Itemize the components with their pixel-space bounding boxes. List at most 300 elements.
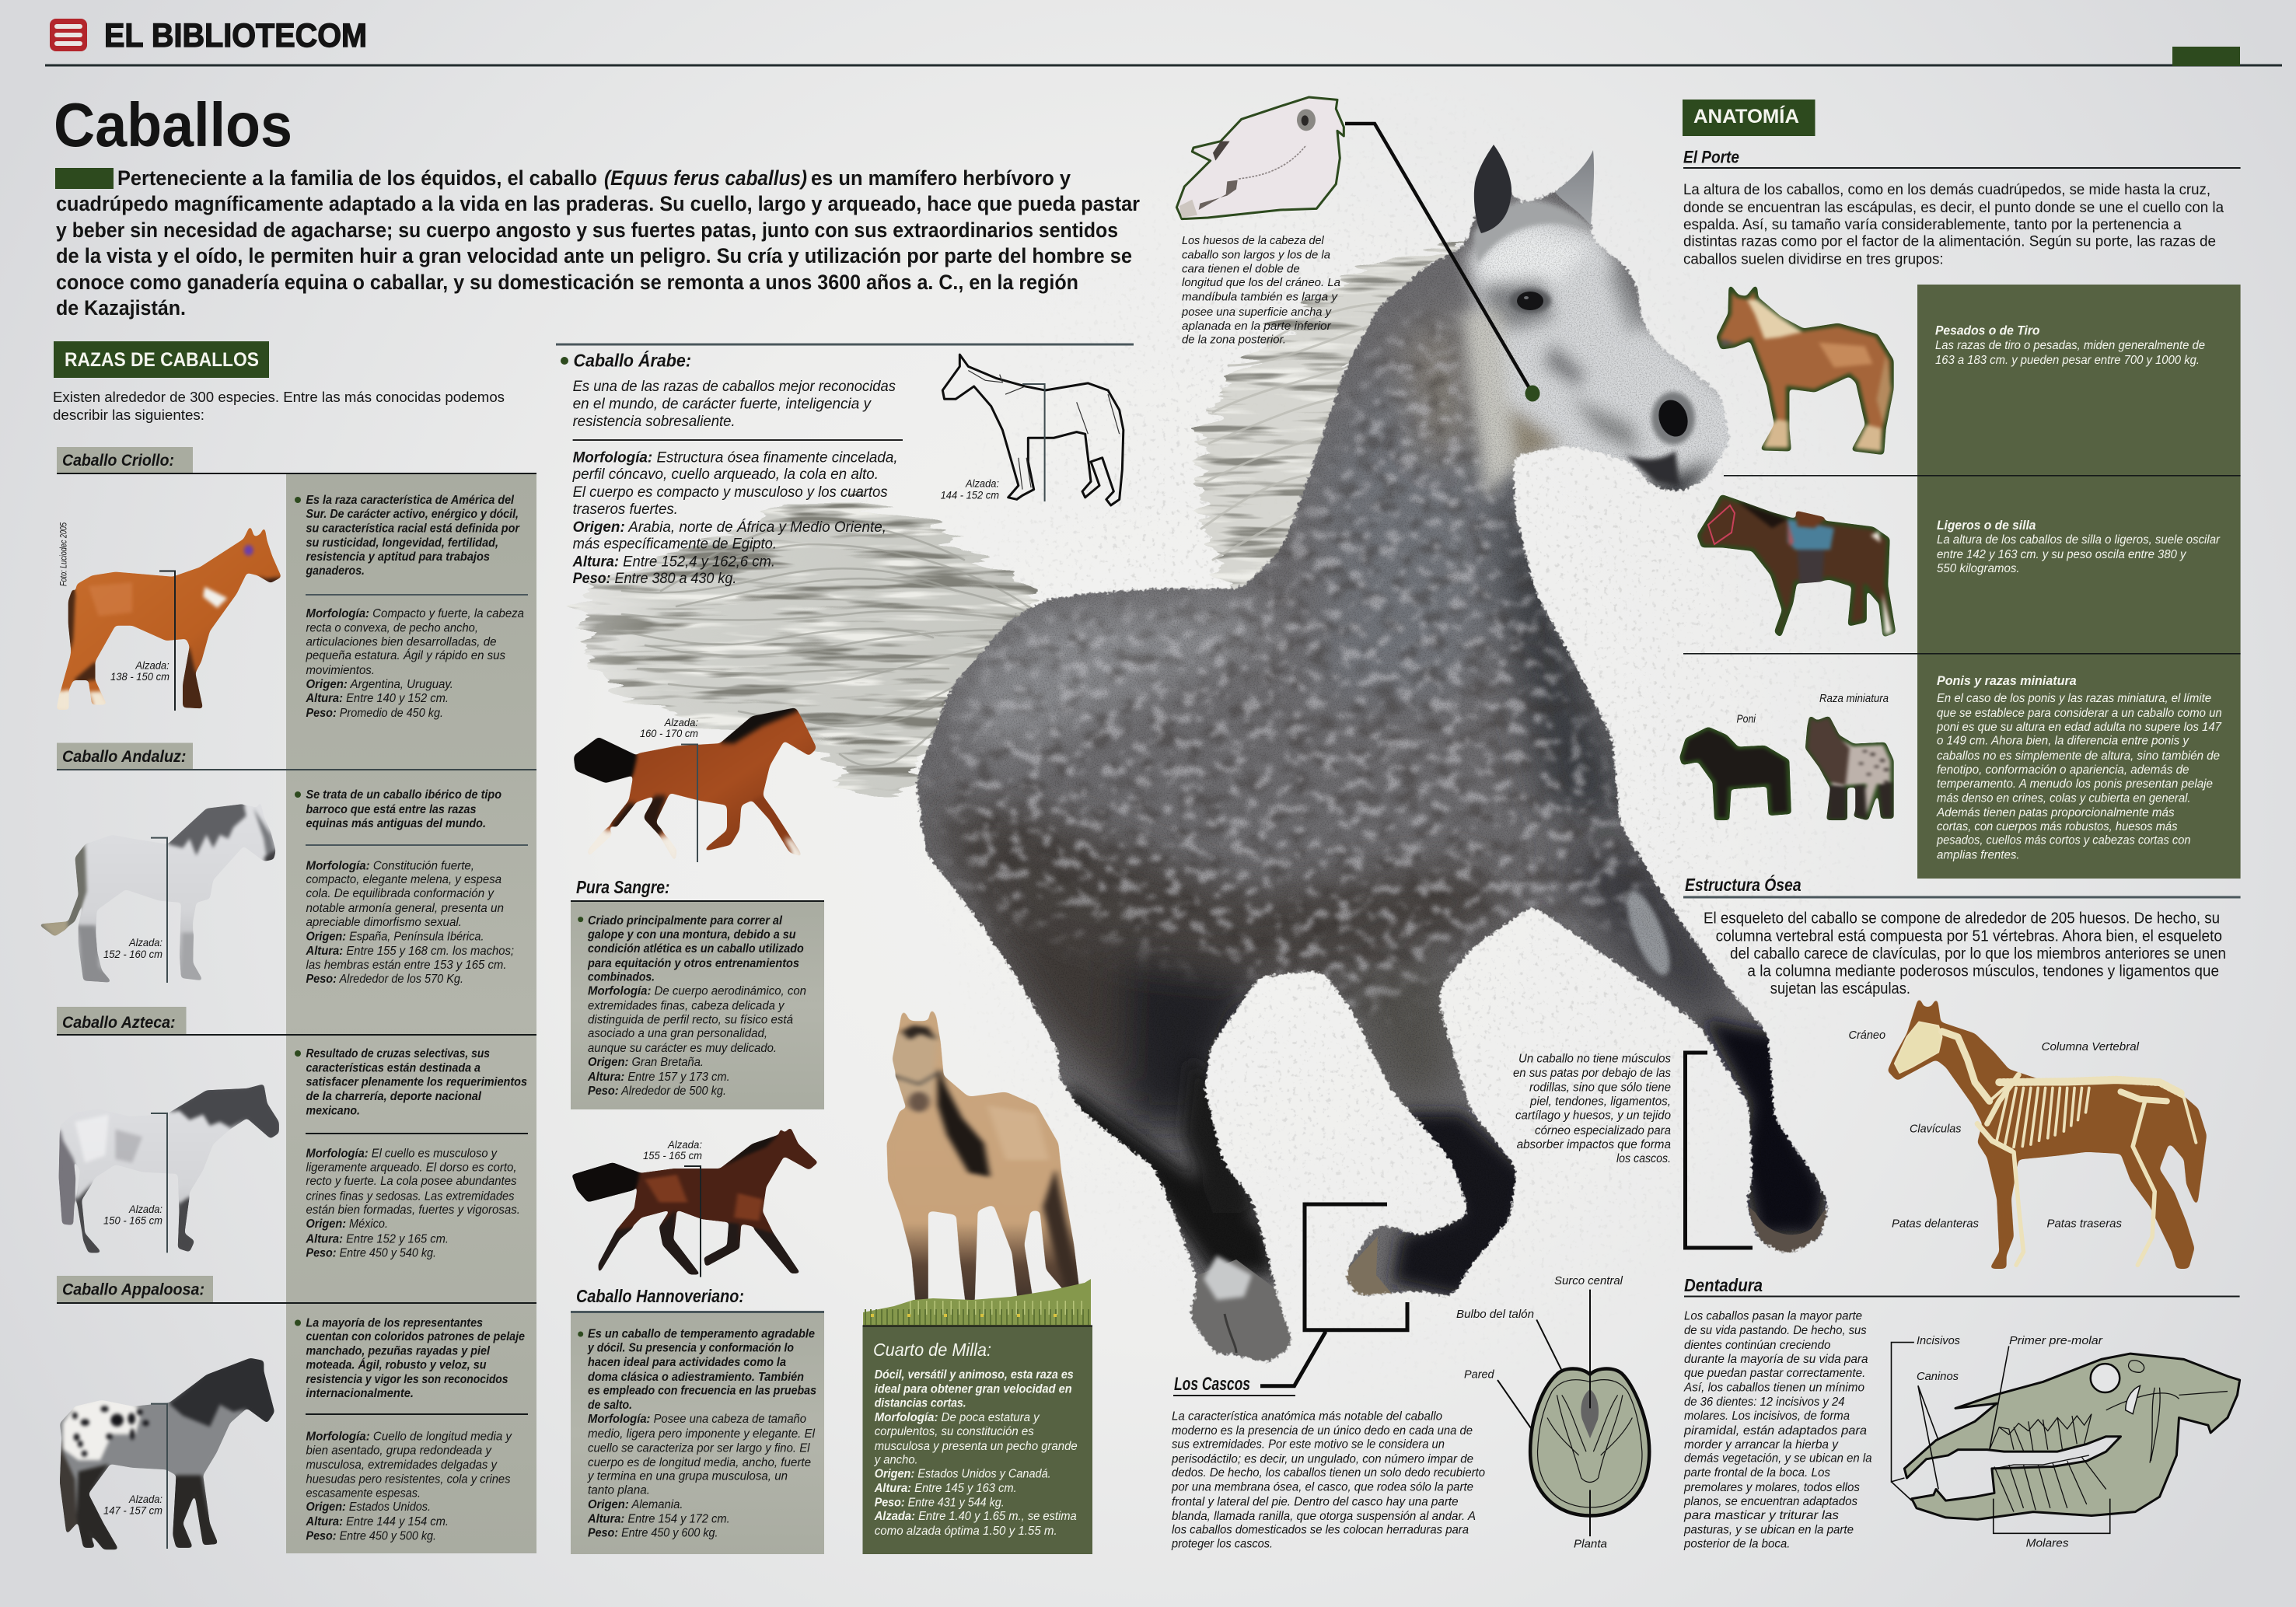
- skull labels: Caninos: [1917, 1370, 1959, 1383]
- eye socket: [2091, 1364, 2120, 1392]
- intro paragraph: (Equus ferus caballus): [604, 166, 807, 190]
- horse: Cuarto de Milla: [886, 1004, 1080, 1308]
- details: Morfología: El cuello es musculoso y: [306, 1148, 498, 1160]
- header green tab: [2172, 47, 2240, 66]
- description: Es una de las razas de caballos mejor reconocidas: [573, 379, 896, 395]
- main horse mane: [1200, 247, 1464, 614]
- text: piramidal, están adaptados para: [1683, 1424, 1867, 1438]
- description: [587, 1328, 816, 1540]
- height label: [110, 659, 169, 683]
- height label: Alzada:: [664, 717, 698, 728]
- text: [1683, 1309, 1872, 1551]
- text: para masticar y triturar las: [1683, 1509, 1839, 1522]
- description: Es un caballo de temperamento agradable: [588, 1328, 815, 1340]
- description: Peso: Entre 450 y 600 kg.: [588, 1527, 718, 1540]
- skull caption: aplanada en la parte inferior: [1182, 320, 1332, 333]
- height label: [103, 1493, 163, 1517]
- text: La altura de los caballos, como en los demás cuadrúpedos, se mide hasta la cruz,: [1683, 182, 2210, 198]
- description: Dócil, versátil y animoso, esta raza es: [875, 1368, 1074, 1382]
- height label: 150 - 165 cm: [103, 1214, 163, 1227]
- text: ponis: cortas, con cuerpos más robustos, huesos más: [1937, 820, 2178, 833]
- breed: Caballo Appaloosa: [57, 1276, 536, 1549]
- description: [874, 1368, 1078, 1538]
- icon: logo stack: [50, 19, 87, 51]
- height label: Alzada:: [135, 659, 169, 672]
- horse: saddle horse: [1699, 496, 1894, 635]
- details: Morfología: Estructura ósea finamente cincelada,: [573, 449, 898, 466]
- height label: Alzada:: [128, 936, 163, 948]
- bullet: [295, 497, 301, 503]
- horse: Criollo: [57, 525, 282, 710]
- skeleton labels: Patas traseras: [2046, 1217, 2122, 1231]
- height marker: [159, 571, 175, 711]
- description: combinados.: [588, 971, 655, 984]
- description: ideal para obtener gran velocidad en: [875, 1383, 1072, 1396]
- text: de su vida pastando. De hecho, sus: [1684, 1324, 1867, 1337]
- summary: [306, 788, 501, 830]
- summary: ganaderos.: [306, 564, 365, 578]
- summary: de la charrería, deporte nacional: [306, 1090, 482, 1103]
- text: del caballo carece de clavículas, por lo que los miembros anteriores se unen: [1730, 945, 2226, 962]
- text: sujetan las escápulas.: [1770, 980, 1910, 997]
- tab: Azteca: [57, 1007, 187, 1034]
- note: musculos: en sus patas por debajo de las: [1513, 1067, 1671, 1080]
- skull outline: [1904, 1354, 2240, 1519]
- description: y termina en una grupa musculosa, un: [587, 1470, 788, 1483]
- description: de salto.: [588, 1399, 632, 1412]
- logo wordmark: EL BIBLIOTECOM: [104, 17, 367, 54]
- text: proteger los cascos.: [1171, 1538, 1273, 1551]
- intro marker block: [55, 168, 114, 189]
- text: premolares y molares, todos ellos: [1683, 1481, 1860, 1494]
- grass: [863, 1279, 1091, 1326]
- tab: Appaloosa: [57, 1276, 213, 1303]
- details: articulaciones bien desarrolladas, de: [306, 636, 497, 648]
- hair grain: [894, 117, 1866, 1399]
- text: pasturas, y se ubican en la parte: [1683, 1524, 1854, 1537]
- horse: pony: [1681, 728, 1790, 819]
- skull caption: caballo son largos y los de la: [1182, 249, 1330, 262]
- text: pesados: Pesados o de Tiro: [1935, 323, 2040, 337]
- description: para equitación y otros entrenamientos: [587, 957, 799, 970]
- note: musculos: córneo especializado para: [1535, 1124, 1671, 1137]
- text: espalda. Así, su tamaño varía considerablemente, tanto por la pertenencia a: [1683, 217, 2182, 233]
- horse outline drawing: [942, 355, 1124, 505]
- summary: resistencia y vigor les son reconocidos: [306, 1373, 508, 1386]
- panel: [571, 1312, 824, 1554]
- description: aunque su carácter es muy delicado.: [588, 1042, 777, 1055]
- summary: resistencia y aptitud para trabajos: [306, 550, 490, 564]
- description: como alzada óptima 1.50 y 1.55 m.: [875, 1525, 1057, 1538]
- intro paragraph: conoce como ganadería equina o caballar, y su domesticación se remonta a unos 3600 años a. C., en la región: [56, 271, 1078, 294]
- label: planta: Planta: [1574, 1538, 1607, 1551]
- details: Peso: Entre 450 y 500 kg.: [306, 1530, 436, 1543]
- summary: La mayoría de los representantes: [306, 1317, 483, 1330]
- breed: Caballo Criollo: [57, 447, 536, 720]
- height label: [941, 477, 999, 501]
- skeleton diagram: [1888, 996, 2207, 1269]
- details: [306, 607, 524, 720]
- description: Altura: Entre 154 y 172 cm.: [587, 1513, 730, 1525]
- label: raza miniatura: Raza miniatura: [1819, 693, 1889, 705]
- description: Origen: Gran Bretaña.: [588, 1056, 704, 1069]
- text: dientes continúan creciendo: [1684, 1339, 1830, 1352]
- brown horse silhouette: [1888, 996, 2207, 1269]
- text: ligeros: 550 kilogramos.: [1937, 562, 2020, 575]
- heading: razas de caballos: [54, 341, 269, 378]
- details: musculosa, extremidades delgadas y: [306, 1459, 498, 1472]
- height label: Alzada:: [128, 1203, 163, 1215]
- heading: Dentadura: [1684, 1275, 1763, 1295]
- details: recta o convexa, de pecho ancho,: [306, 622, 478, 634]
- text: Así, los caballos tienen un mínimo: [1683, 1382, 1864, 1395]
- section: los cascos: [1171, 1374, 1485, 1551]
- heading: El Porte: [1683, 148, 1739, 167]
- text: morder y arrancar la hierba y: [1684, 1438, 1839, 1452]
- details: Altura: Entre 152 y 165 cm.: [306, 1233, 449, 1245]
- summary: cuentan con coloridos patrones de pelaje: [306, 1330, 525, 1343]
- description: corpulentos, su constitución es: [875, 1425, 1034, 1438]
- details: Altura: Entre 140 y 152 cm.: [306, 692, 449, 705]
- horse tonal shading: [933, 311, 1726, 1127]
- height label: Alzada:: [965, 477, 999, 490]
- skull pointer line: [1345, 124, 1532, 393]
- details: Origen: España, Península Ibérica.: [306, 930, 484, 944]
- details: Altura: Entre 155 y 168 cm. los machos;: [306, 945, 514, 958]
- panel: [571, 901, 824, 1109]
- skeleton labels: [1849, 1029, 2140, 1231]
- details: recto y fuerte. La cola posee abundantes: [306, 1175, 517, 1188]
- summary: su rusticidad, longevidad, fertilidad,: [306, 536, 498, 550]
- summary: Se trata de un caballo ibérico de tipo: [306, 788, 501, 802]
- details: apreciable dimorfismo sexual.: [306, 916, 462, 929]
- description: distinguida de perfil recto, su físico está: [588, 1014, 793, 1026]
- text: pesados: Las razas de tiro o pesadas, miden generalmente de: [1935, 339, 2205, 352]
- text: ligeros: [1937, 519, 2221, 575]
- intro paragraph: es un mamífero herbívoro y: [811, 166, 1071, 190]
- text: ligeros: entre 142 y 163 cm. y su peso oscila entre 380 y: [1937, 548, 2187, 561]
- heading: anatomia: ANATOMÍA: [1693, 105, 1799, 128]
- height marker: [151, 838, 167, 983]
- height marker: [151, 1404, 167, 1549]
- details: Morfología: Cuello de longitud media y: [306, 1431, 512, 1443]
- main horse tail: [579, 501, 1045, 794]
- skull caption: posee una superficie ancha y: [1181, 306, 1332, 319]
- summary: equinas más antiguas del mundo.: [306, 817, 486, 830]
- details: Peso: Alrededor de los 570 Kg.: [306, 973, 463, 986]
- height label: [103, 936, 163, 960]
- description: Altura: Entre 157 y 173 cm.: [587, 1071, 730, 1084]
- summary: Sur. De carácter activo, enérgico y dócil,: [306, 508, 519, 521]
- breed: Caballo Árabe: [561, 350, 1124, 587]
- text: que puedan pastar correctamente.: [1684, 1367, 1865, 1380]
- description: Criado principalmente para correr al: [588, 914, 783, 928]
- skull labels: [1917, 1334, 2103, 1550]
- skull photo: [1176, 97, 1344, 219]
- bullet: [561, 357, 568, 365]
- text: ponis: amplias frentes.: [1937, 849, 2020, 862]
- details: [572, 449, 898, 587]
- summary: Resultado de cruzas selectivas, sus: [306, 1047, 490, 1060]
- horse: draft horse: [1718, 287, 1892, 453]
- details: ligeramente arqueado. El dorso es corto,: [306, 1162, 516, 1175]
- hoof diagram: [1456, 1274, 1649, 1551]
- skull caption: [1181, 234, 1340, 347]
- summary: moteada. Ágil, robusto y veloz, su: [306, 1359, 487, 1372]
- photo credit: Foto: Luciodec 2005: [58, 522, 68, 586]
- text: ponis: [1936, 674, 2222, 862]
- heading: Caballo Árabe:: [574, 350, 691, 370]
- text: caballos suelen dividirse en tres grupos:: [1683, 252, 1944, 268]
- details: Altura: Entre 152,4 y 162,6 cm.: [572, 554, 775, 571]
- center column rule: [556, 344, 1134, 345]
- details: Peso: Promedio de 450 kg.: [306, 707, 443, 720]
- text: ponis: En el caso de los ponis y las razas miniatura, el límite: [1937, 692, 2211, 705]
- details: Origen: México.: [306, 1217, 388, 1231]
- text: parte frontal de la boca. Los: [1683, 1466, 1830, 1479]
- hoof sole: [1530, 1290, 1649, 1536]
- height marker: [681, 745, 697, 862]
- lower legs dark: [1057, 1018, 1827, 1298]
- details: El cuerpo es compacto y musculoso y los cuartos: [573, 484, 888, 501]
- text: distintas razas como por el factor de la alimentación. Según su porte, las razas de: [1683, 234, 2216, 250]
- details: [306, 859, 514, 986]
- description: Morfología: De cuerpo aerodinámico, con: [588, 984, 806, 998]
- height label: 155 - 165 cm: [643, 1150, 702, 1162]
- horse: Andaluz: [38, 801, 275, 983]
- pointer dot: [1525, 386, 1539, 401]
- text: ponis: pesados, cuellos más cortos y cabezas cortas con: [1936, 834, 2191, 847]
- text: pesados: [1935, 323, 2205, 367]
- header rule: [45, 64, 2282, 67]
- text: pesados: 163 a 183 cm. y pueden pesar entre 700 y 1000 kg.: [1935, 354, 2200, 367]
- intro paragraph: Perteneciente a la familia de los équidos, el caballo: [117, 166, 597, 190]
- text: ligeros: Ligeros o de silla: [1937, 519, 2036, 533]
- height marker: [151, 1113, 167, 1252]
- head coat: [1462, 198, 1742, 505]
- skull caption: de la zona posterior.: [1182, 334, 1286, 347]
- tab: Criollo: [57, 447, 193, 473]
- skeleton labels: Clavículas: [1910, 1123, 1962, 1136]
- details: cola. De equilibrada conformación y: [306, 887, 494, 900]
- upper teeth: [1990, 1414, 2092, 1452]
- summary: satisfacer plenamente los requerimientos: [306, 1076, 527, 1089]
- description: es empleado con frecuencia en las pruebas: [588, 1385, 816, 1398]
- dapple pattern: [855, 233, 1788, 1166]
- section: el porte: [1683, 148, 2241, 268]
- saddle horse halter: [1708, 505, 1735, 544]
- heading: razas de caballos: RAZAS DE CABALLOS: [65, 349, 259, 371]
- left ear: [1474, 145, 1511, 233]
- summary: manchado, pezuñas rayadas y piel: [306, 1345, 491, 1357]
- summary: mexicano.: [306, 1104, 360, 1118]
- description: distancias cortas.: [875, 1396, 966, 1410]
- details: Peso: Entre 380 a 430 kg.: [573, 571, 736, 587]
- text: molares. Los incisivos, de forma: [1684, 1410, 1850, 1423]
- text: [1704, 910, 2226, 997]
- skull caption: cara tienen el doble de: [1182, 263, 1300, 276]
- panel: porte groups: [1917, 285, 2241, 879]
- forelock: [1473, 202, 1591, 264]
- text: El esqueleto del caballo se compone de alrededor de 205 huesos. De hecho, su: [1704, 910, 2220, 928]
- text: demás vegetación, y se ubican en la: [1684, 1452, 1872, 1466]
- panel: [863, 1326, 1092, 1554]
- description: resistencia sobresaliente.: [573, 414, 736, 430]
- details: movimientos.: [306, 664, 375, 677]
- text: sus extremidades. Por este motivo se le considera un: [1172, 1438, 1445, 1452]
- description: tanto plana.: [588, 1483, 650, 1497]
- tab: Andaluz: [57, 743, 193, 770]
- text: durante la mayoría de su vida para: [1684, 1353, 1868, 1366]
- description: hacen ideal para actividades como la: [588, 1356, 786, 1369]
- eye: [1509, 288, 1551, 313]
- bracket: pata: [1686, 1053, 1753, 1248]
- heading: Caballo Hannoveriano:: [576, 1286, 744, 1306]
- summary: Es la raza característica de América del: [306, 494, 515, 507]
- note: musculos: piel, tendones, ligamentos,: [1529, 1095, 1671, 1109]
- intro paragraph: de la vista y el oído, le permiten huir a gran velocidad ante un peligro. Su cría y utilización por parte del hombre se: [56, 244, 1132, 267]
- details: compacto, elegante melena, y espesa: [306, 873, 501, 886]
- razas intro text: [53, 389, 505, 423]
- pared leader: [1497, 1380, 1531, 1428]
- text: ponis: temperamento. A menudo los ponis presentan pelaje: [1937, 777, 2213, 791]
- skeleton bones: [1895, 1022, 2196, 1265]
- skeleton labels: Cráneo: [1849, 1029, 1885, 1042]
- summary: [306, 1317, 525, 1400]
- text: ponis: fenotipo, conformación o apariencia, además de: [1937, 763, 2189, 777]
- height marker: [684, 1166, 701, 1277]
- height label: 147 - 157 cm: [103, 1504, 163, 1517]
- details: Morfología: Compacto y fuerte, la cabeza: [306, 607, 524, 620]
- lower teeth: [1994, 1455, 2106, 1512]
- summary: [306, 1047, 527, 1118]
- text: columna vertebral está compuesta por 51 vértebras. Ahora bien, el esqueleto: [1716, 928, 2222, 945]
- description: extremidades finas, cabeza delicada y: [588, 1000, 785, 1013]
- height label: [103, 1203, 163, 1227]
- height marker: [1022, 384, 1045, 501]
- height label: 160 - 170 cm: [640, 728, 698, 739]
- description: asociado a una gran personalidad,: [588, 1027, 767, 1040]
- details: bien asentado, grupa redondeada y: [306, 1445, 492, 1458]
- razas intro text: Existen alrededor de 300 especies. Entre las más conocidas podemos: [53, 389, 505, 405]
- description: Origen: Estados Unidos y Canadá.: [875, 1467, 1051, 1480]
- details: [306, 1148, 520, 1260]
- description: en el mundo, de carácter fuerte, inteligencia y: [573, 397, 872, 413]
- height label: 138 - 150 cm: [110, 670, 169, 683]
- arrow: los cascos leader: [1260, 1332, 1326, 1386]
- text: a la columna mediante poderosos músculos, tendones y ligamentos que: [1747, 963, 2219, 980]
- horse base coat: [894, 117, 1866, 1399]
- text: ponis: Además tienen patas proporcionalmente más: [1936, 806, 2175, 819]
- nostril: [1651, 392, 1695, 445]
- text: [1683, 182, 2224, 268]
- breed: Cuarto de Milla: [863, 1004, 1092, 1554]
- skull labels: Incisivos: [1917, 1334, 1960, 1347]
- skull diagram: [1891, 1343, 2240, 1533]
- horse: miniature: [1807, 718, 1892, 819]
- details: Morfología: Constitución fuerte,: [306, 859, 474, 872]
- text: ponis: más denso en crines, colas y cubierta en general.: [1937, 791, 2191, 805]
- summary: barroco que está entre las razas: [306, 803, 477, 816]
- heading: Pura Sangre:: [576, 877, 670, 897]
- text: por una membrana ósea, el casco, que rodea sólo la parte: [1171, 1481, 1473, 1494]
- text: ligeros: La altura de los caballos de silla o ligeros, suele oscilar: [1937, 533, 2221, 547]
- details: Altura: Entre 144 y 154 cm.: [306, 1515, 449, 1528]
- details: las hembras están entre 153 y 165 cm.: [306, 959, 507, 972]
- skull caption: mandíbula también es larga y: [1182, 291, 1339, 304]
- tab: Andaluz: Caballo Andaluz:: [62, 748, 187, 766]
- summary: características están destinada a: [306, 1062, 481, 1074]
- summary: su característica racial está definida por: [306, 522, 520, 536]
- skull labels: Primer pre-molar: [2009, 1334, 2103, 1347]
- pointer lines: [1891, 1343, 2110, 1533]
- text: ponis: Ponis y razas miniatura: [1937, 674, 2077, 688]
- text: frontal y lateral del pie. Dentro del casco hay una parte: [1172, 1496, 1459, 1509]
- height label: [640, 717, 698, 739]
- intro paragraph: [55, 166, 1140, 320]
- text: ponis: que se establece para considerar a un caballo como un: [1937, 707, 2222, 720]
- group rules: [1683, 475, 2241, 655]
- skeleton labels: Columna Vertebral: [2042, 1040, 2140, 1053]
- text: de 36 dientes: 12 incisivos y 24: [1684, 1396, 1845, 1409]
- text: donde se encuentran las escápulas, es decir, el punto donde se une el cuello con la: [1683, 200, 2224, 216]
- note: musculos: absorber impactos que forma: [1517, 1138, 1671, 1151]
- text: blanda, llamada ranilla, que otorga suspensión al andar. A: [1172, 1510, 1476, 1523]
- summary: internacionalmente.: [306, 1387, 414, 1400]
- text: perisodáctilo; es decir, un ungulado, con número impar de: [1171, 1453, 1473, 1466]
- details: huesudas pero resistentes, cola y crines: [306, 1473, 511, 1486]
- tab: Criollo: Caballo Criollo:: [62, 452, 174, 470]
- hooves: [1190, 1207, 1827, 1364]
- bullet: [295, 791, 301, 798]
- main horse: grey dappled galloping horse: [914, 145, 1829, 1364]
- logo: [50, 17, 367, 54]
- description: condición atlética es un caballo utilizado: [588, 942, 804, 955]
- details: perfil cóncavo, cuello arqueado, la cola en alto.: [572, 466, 879, 483]
- horse: Azteca: [59, 1084, 279, 1252]
- horse: Appaloosa: [60, 1358, 274, 1549]
- text: planos, se encuentran adaptados: [1683, 1495, 1857, 1508]
- text: dedos. De hecho, los caballos tienen un solo dedo recubierto: [1172, 1466, 1485, 1479]
- skeleton labels: Patas delanteras: [1892, 1217, 1979, 1231]
- heading: Los Cascos: [1174, 1374, 1250, 1395]
- details: más específicamente de Egipto.: [573, 536, 777, 552]
- tab: Appaloosa: Caballo Appaloosa:: [62, 1281, 204, 1298]
- text: los caballos domesticados se les colocan herraduras para: [1172, 1524, 1469, 1537]
- description: Origen: Alemania.: [588, 1498, 683, 1511]
- description: Alzada: Entre 1.40 y 1.65 m., se estima: [874, 1510, 1077, 1523]
- text: ponis: caballos no es simplemente de altura, sino también de: [1937, 749, 2220, 763]
- description: Morfología: De poca estatura y: [875, 1411, 1040, 1424]
- details: Origen: Estados Unidos.: [306, 1500, 431, 1514]
- title: Caballos: [54, 90, 292, 159]
- description: y dócil. Su presencia y conformación lo: [587, 1342, 794, 1355]
- skull caption: longitud que los del cráneo. La: [1182, 276, 1340, 289]
- breed: Caballo Hannoveriano: [571, 1127, 824, 1554]
- leg highlight: [1619, 886, 1678, 980]
- label: poni: Poni: [1737, 714, 1756, 726]
- bullet: [578, 1331, 583, 1337]
- height label: 144 - 152 cm: [941, 490, 999, 501]
- summary: [306, 494, 520, 578]
- description: cuerpo es de longitud media, ancho, fuerte: [588, 1456, 811, 1469]
- text: La característica anatómica más notable del caballo: [1172, 1410, 1442, 1424]
- details: crines finas y sedosas. Las extremidades: [306, 1190, 515, 1204]
- description: Peso: Entre 431 y 544 kg.: [875, 1497, 1005, 1510]
- description: Peso: Alrededor de 500 kg.: [588, 1085, 726, 1098]
- horse: Pura Sangre: [574, 707, 817, 862]
- description: musculosa y presenta un pecho grande: [875, 1440, 1078, 1453]
